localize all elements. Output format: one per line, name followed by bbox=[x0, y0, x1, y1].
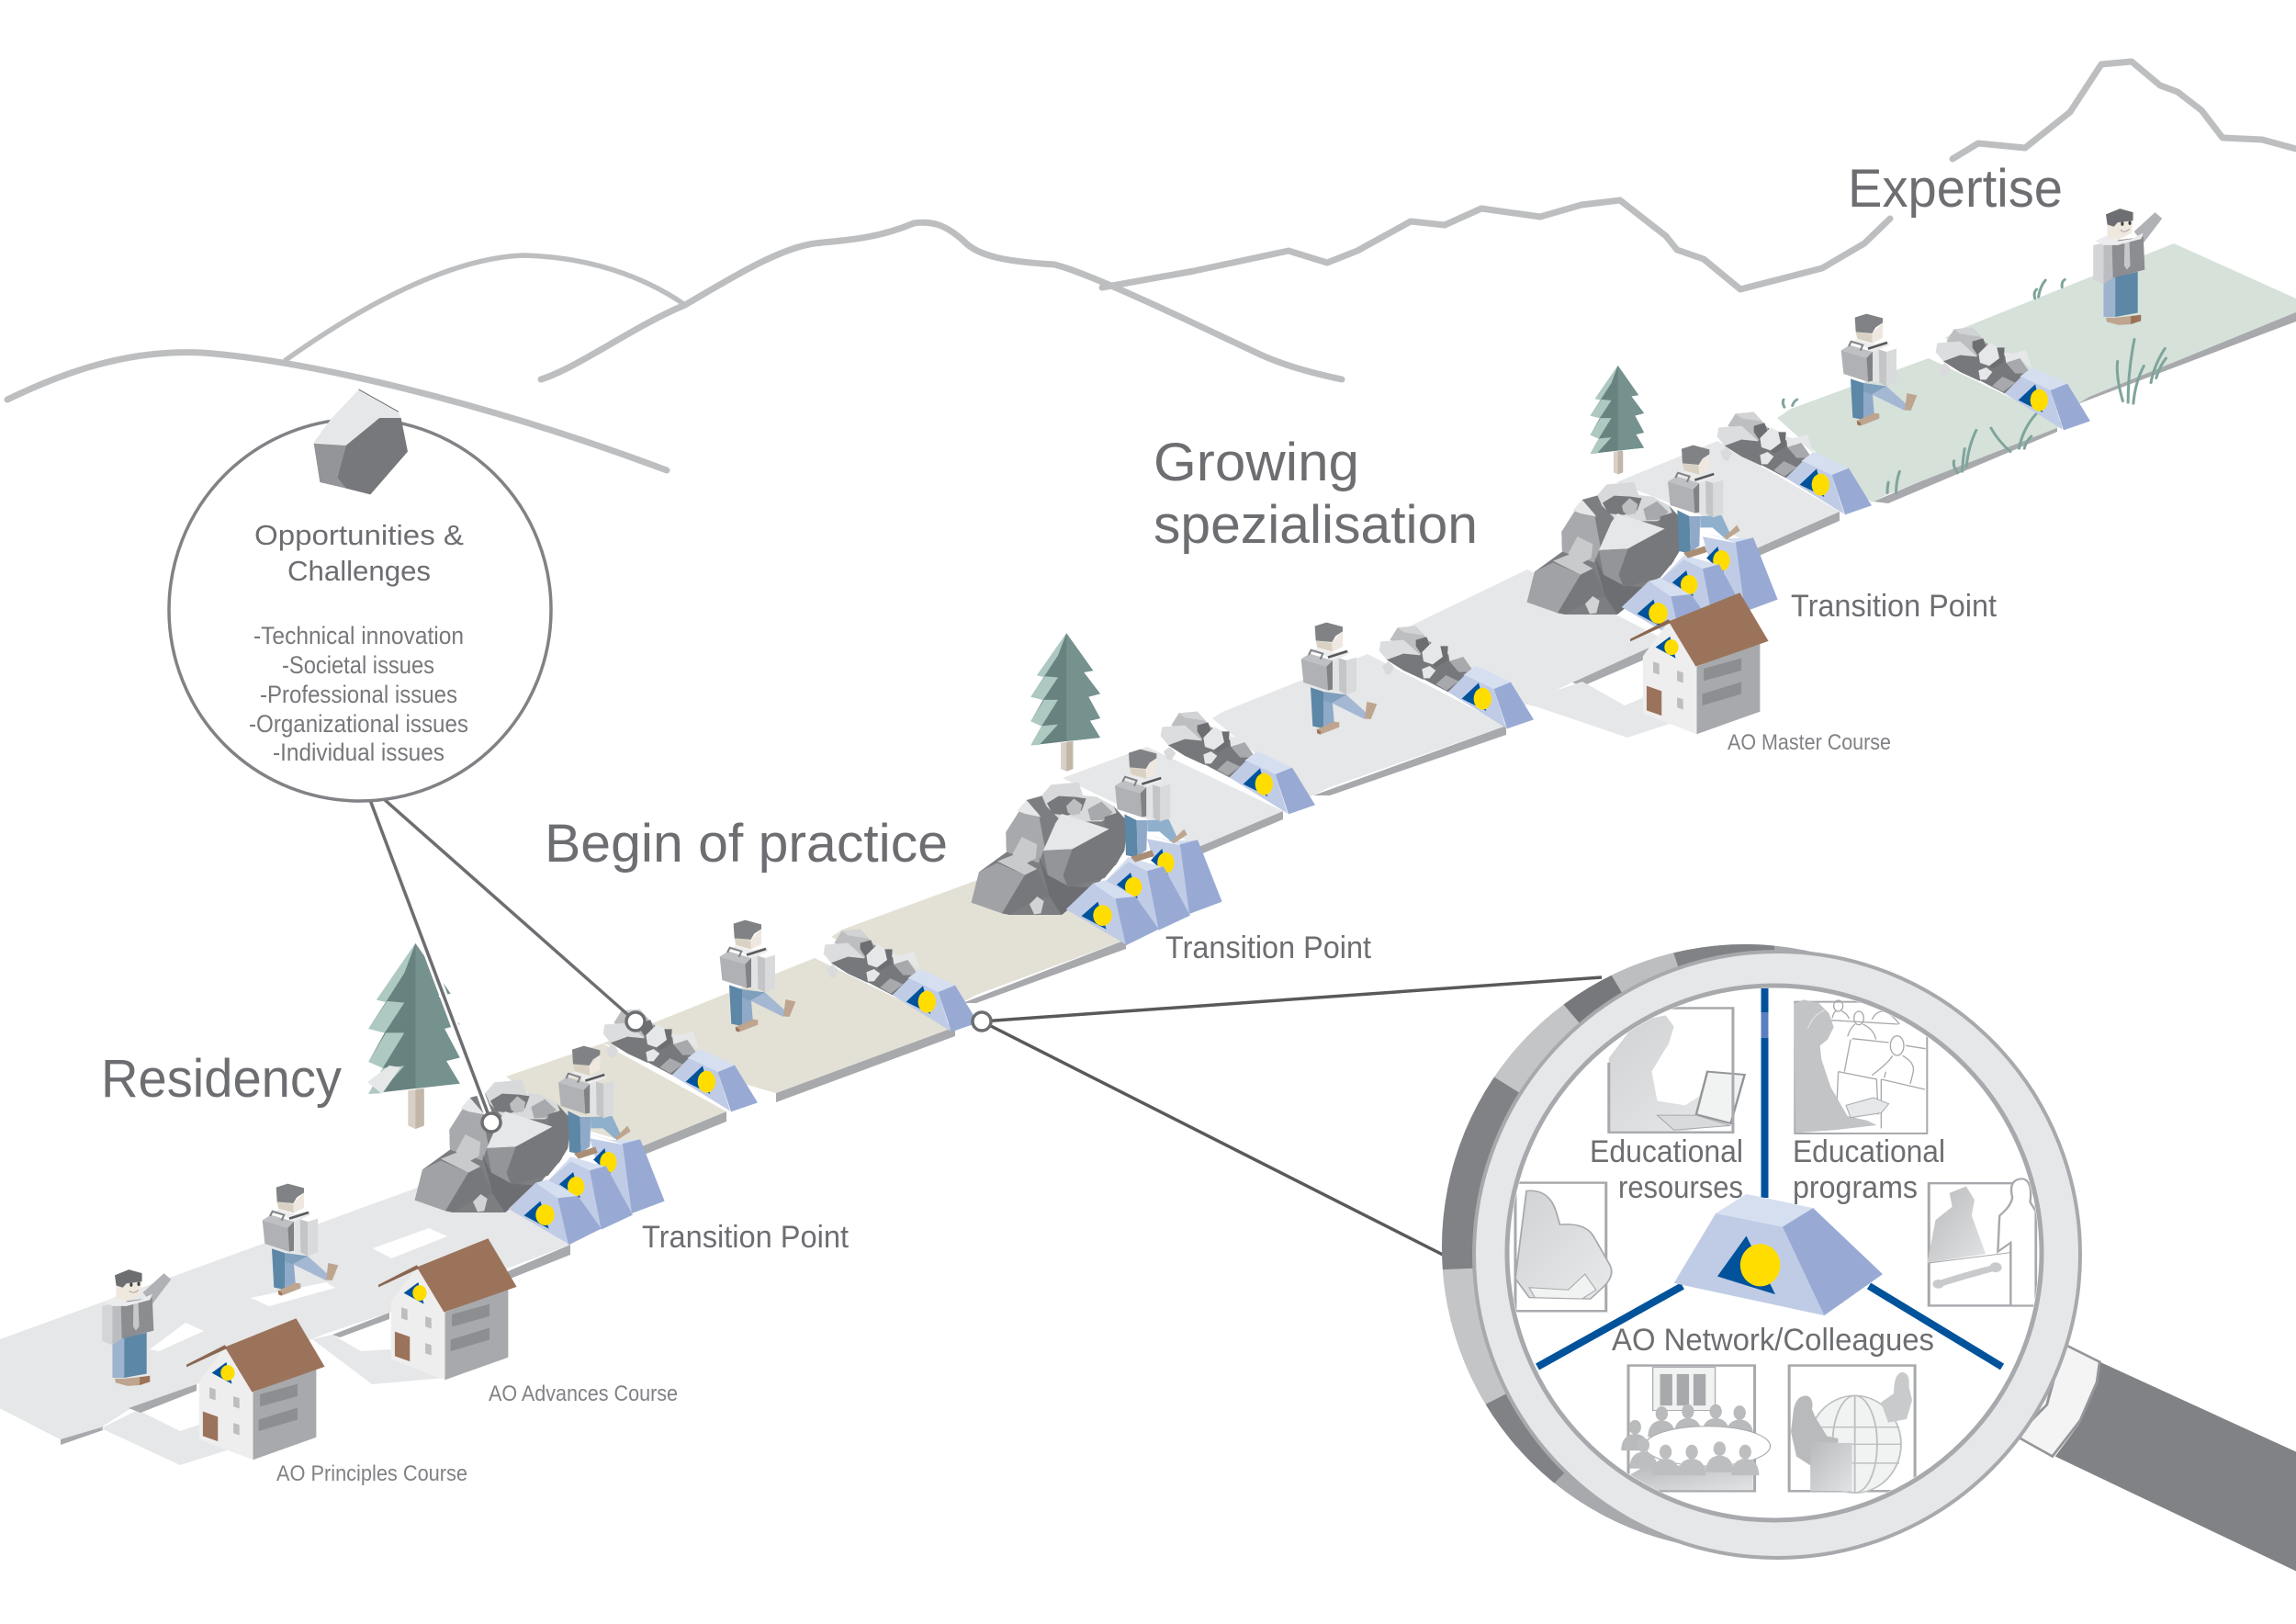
illustration: lecture bbox=[1794, 999, 1927, 1133]
label: transition point 3: Transition Point bbox=[1791, 589, 1998, 624]
circle list bbox=[249, 622, 468, 766]
small rocks and AO wedge 1 bbox=[603, 1009, 758, 1111]
path: growing specialisation grey plates bbox=[1063, 441, 1840, 855]
circle list: -Individual issues bbox=[273, 739, 445, 766]
person: resident walking bbox=[263, 1184, 338, 1296]
illustration: laptop learner bbox=[1609, 1009, 1745, 1133]
magnifier ring and lens bbox=[1474, 952, 2080, 1558]
person: expertise walking bbox=[1841, 314, 1917, 426]
label: educational programs bbox=[1793, 1134, 1945, 1205]
label: AO Advances Course: AO Advances Course bbox=[489, 1382, 678, 1406]
panel: opportunities and challenges circle bbox=[169, 389, 551, 801]
tree: residency bbox=[367, 943, 460, 1129]
house: AO Master Course bbox=[1630, 592, 1769, 734]
tree: growing specialisation bbox=[1591, 366, 1644, 474]
label: educational programs: programs bbox=[1793, 1170, 1918, 1205]
circle list: -Societal issues bbox=[282, 651, 434, 679]
callout leader lines from opportunities circle bbox=[370, 799, 645, 1132]
circle list: -Technical innovation bbox=[253, 622, 464, 649]
circle list: -Organizational issues bbox=[249, 710, 468, 738]
callout leader lines to magnifier bbox=[973, 977, 1602, 1257]
tree: begin of practice bbox=[1030, 633, 1100, 772]
small rocks and AO wedge 5 bbox=[1717, 412, 1872, 514]
small rocks and AO wedge 4 bbox=[1379, 626, 1534, 728]
circle heading bbox=[254, 519, 464, 587]
transition point 3: boulders, wedges, climber bbox=[1527, 445, 1778, 643]
house: AO Principles Course bbox=[186, 1318, 325, 1460]
small rocks and AO wedge 2 bbox=[824, 930, 978, 1032]
label: AO Master Course: AO Master Course bbox=[1728, 730, 1891, 755]
person: expert waving bbox=[2093, 209, 2162, 325]
grass tufts on expertise plates bbox=[1783, 279, 2166, 493]
person: begin of practice walking bbox=[720, 920, 795, 1032]
heading: Expertise: Expertise bbox=[1848, 159, 2063, 219]
icon: boulder bbox=[314, 389, 408, 494]
magnifier handle bbox=[2016, 1344, 2296, 1571]
circle heading: Opportunities & bbox=[254, 519, 464, 551]
label: educational resources: Educational bbox=[1590, 1134, 1743, 1169]
magnifying glass bbox=[1442, 944, 2296, 1571]
heading: Growing spezialisation: Growing bbox=[1154, 433, 1359, 492]
person: growing specialisation walking bbox=[1301, 623, 1377, 735]
person: resident waving bbox=[102, 1269, 171, 1386]
path: residency road with course branches bbox=[0, 1145, 588, 1465]
heading: Growing spezialisation: spezialisation bbox=[1154, 495, 1478, 555]
lens illustrations bbox=[1515, 999, 2036, 1493]
path: begin of practice beige plates bbox=[506, 868, 1126, 1156]
label: transition point 1: Transition Point bbox=[642, 1220, 850, 1255]
label: transition point 2: Transition Point bbox=[1165, 930, 1372, 965]
small rocks and AO wedge 6 bbox=[1936, 328, 2090, 430]
illustration: surgeons with bone model bbox=[1927, 1179, 2036, 1305]
label: educational programs: Educational bbox=[1793, 1134, 1945, 1169]
label: educational resources bbox=[1590, 1134, 1743, 1205]
magnifier rim depth bbox=[1442, 944, 1813, 1543]
circle list: -Professional issues bbox=[260, 681, 457, 708]
transition point 1: boulders, wedges, climber bbox=[415, 1046, 665, 1245]
illustration: reader with book bbox=[1515, 1183, 1612, 1311]
path: expertise green plates bbox=[1777, 243, 2296, 503]
label: AO network: AO Network/Colleagues bbox=[1612, 1323, 1934, 1358]
illustration: meeting room bbox=[1621, 1366, 1771, 1491]
transition point 2: boulders, wedges, climber bbox=[972, 750, 1222, 945]
heading: Residency: Residency bbox=[101, 1049, 342, 1109]
circle heading: Challenges bbox=[287, 555, 431, 587]
heading: Begin of practice: Begin of practice bbox=[545, 814, 948, 874]
AO wedge in lens bbox=[1674, 1194, 1883, 1315]
house: AO Advances Course bbox=[378, 1238, 517, 1380]
illustration: globe and colleagues bbox=[1789, 1366, 1915, 1493]
label: AO Principles Course: AO Principles Course bbox=[276, 1461, 467, 1486]
label: educational resources: resourses bbox=[1618, 1170, 1743, 1205]
blue spokes bbox=[1537, 988, 2002, 1367]
background mountains bbox=[7, 62, 2296, 470]
small rocks and AO wedge 3 bbox=[1161, 712, 1315, 814]
heading: Growing spezialisation bbox=[1154, 433, 1478, 555]
